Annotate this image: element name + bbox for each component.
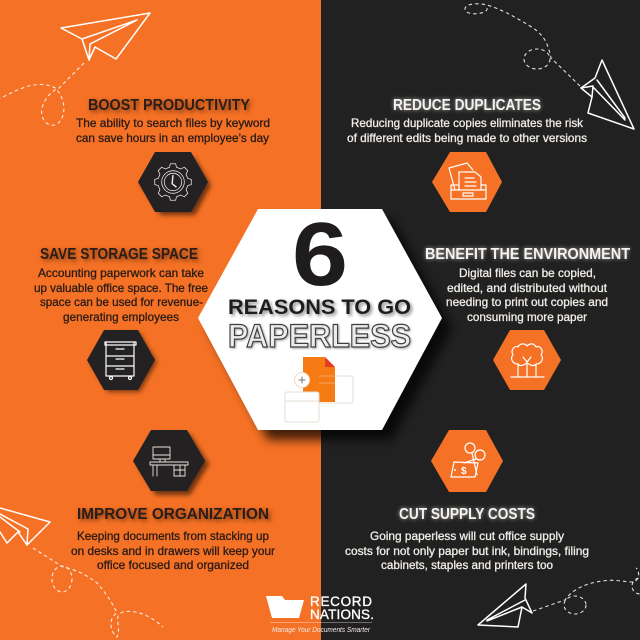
text block: benefit the environment: needing to print out copies and: [446, 295, 608, 309]
icon: paper plane top left: [0, 13, 150, 125]
text block: boost productivity: BOOST PRODUCTIVITY: [88, 97, 251, 114]
center hexagon panel: [198, 209, 442, 430]
text block: improve organization: on desks and in drawers will keep your: [71, 544, 275, 558]
panel: orange background: [0, 0, 321, 640]
logo: record nations: Manage Your Documents Smarter: [272, 625, 370, 634]
text block: save storage space: space can be used for revenue-: [40, 295, 203, 309]
text block: save storage space: [34, 246, 208, 324]
text block: save storage space: Accounting paperwork can take: [38, 266, 204, 280]
text block: cut supply costs: Going paperless will cut office supply: [370, 529, 564, 543]
logo: record nations: [266, 594, 374, 634]
text block: benefit the environment: edited, and distributed without: [447, 281, 608, 295]
text block: save storage space: SAVE STORAGE SPACE: [40, 246, 198, 263]
icon: trees hexagon: [493, 330, 561, 390]
text block: improve organization: [71, 506, 275, 572]
icon: paper plane top right: [465, 4, 634, 129]
icon: filing cabinet hexagon: [87, 330, 157, 392]
text block: benefit the environment: consuming more paper: [467, 310, 587, 324]
text block: improve organization: office focused and organized: [97, 558, 249, 572]
icon: paper plane bottom right: [478, 568, 640, 627]
title: reasons to go: REASONS TO GO: [228, 295, 411, 319]
icon: gear and clock hexagon: [138, 152, 211, 215]
title: paperless outlined: PAPERLESS: [228, 318, 411, 354]
text block: benefit the environment: [425, 246, 630, 324]
text block: reduce duplicates: Reducing duplicate copies eliminates the risk: [351, 116, 584, 130]
text block: cut supply costs: [345, 506, 589, 572]
text block: cut supply costs: costs for not only paper but ink, bindings, filing: [345, 544, 589, 558]
icon: paper plane bottom left: [0, 508, 163, 637]
text block: boost productivity: The ability to search files by keyword: [76, 116, 270, 130]
title: numeral six: 6: [292, 205, 348, 305]
logo: record nations: RECORD: [310, 594, 372, 609]
text block: save storage space: up valuable office space. The free: [34, 281, 208, 295]
text block: improve organization: IMPROVE ORGANIZATION: [77, 506, 269, 523]
logo: record nations: NATIONS.: [310, 607, 374, 622]
text block: cut supply costs: cabinets, staples and printers too: [381, 558, 553, 572]
icon: paper documents: [285, 357, 353, 422]
icon: document tray hexagon: [432, 152, 502, 212]
icon: desk hexagon: [133, 430, 209, 495]
text block: reduce duplicates: [347, 97, 587, 145]
text block: boost productivity: [76, 97, 270, 145]
icon: scissors cutting money hexagon: [431, 430, 503, 492]
text block: improve organization: Keeping documents from stacking up: [77, 529, 269, 543]
text block: save storage space: generating employees: [63, 310, 179, 324]
panel: dark background: [321, 0, 640, 640]
text block: cut supply costs: CUT SUPPLY COSTS: [399, 506, 535, 523]
text block: benefit the environment: Digital files can be copied,: [459, 266, 596, 280]
center hexagon shadow: [208, 219, 452, 440]
text block: reduce duplicates: of different edits being made to other versions: [347, 131, 587, 145]
text block: benefit the environment: BENEFIT THE ENVIRONMENT: [425, 246, 630, 263]
text block: boost productivity: can save hours in an employee’s day: [76, 131, 269, 145]
text block: reduce duplicates: REDUCE DUPLICATES: [393, 97, 541, 114]
icon: scissors cutting money hexagon: $: [461, 466, 467, 477]
